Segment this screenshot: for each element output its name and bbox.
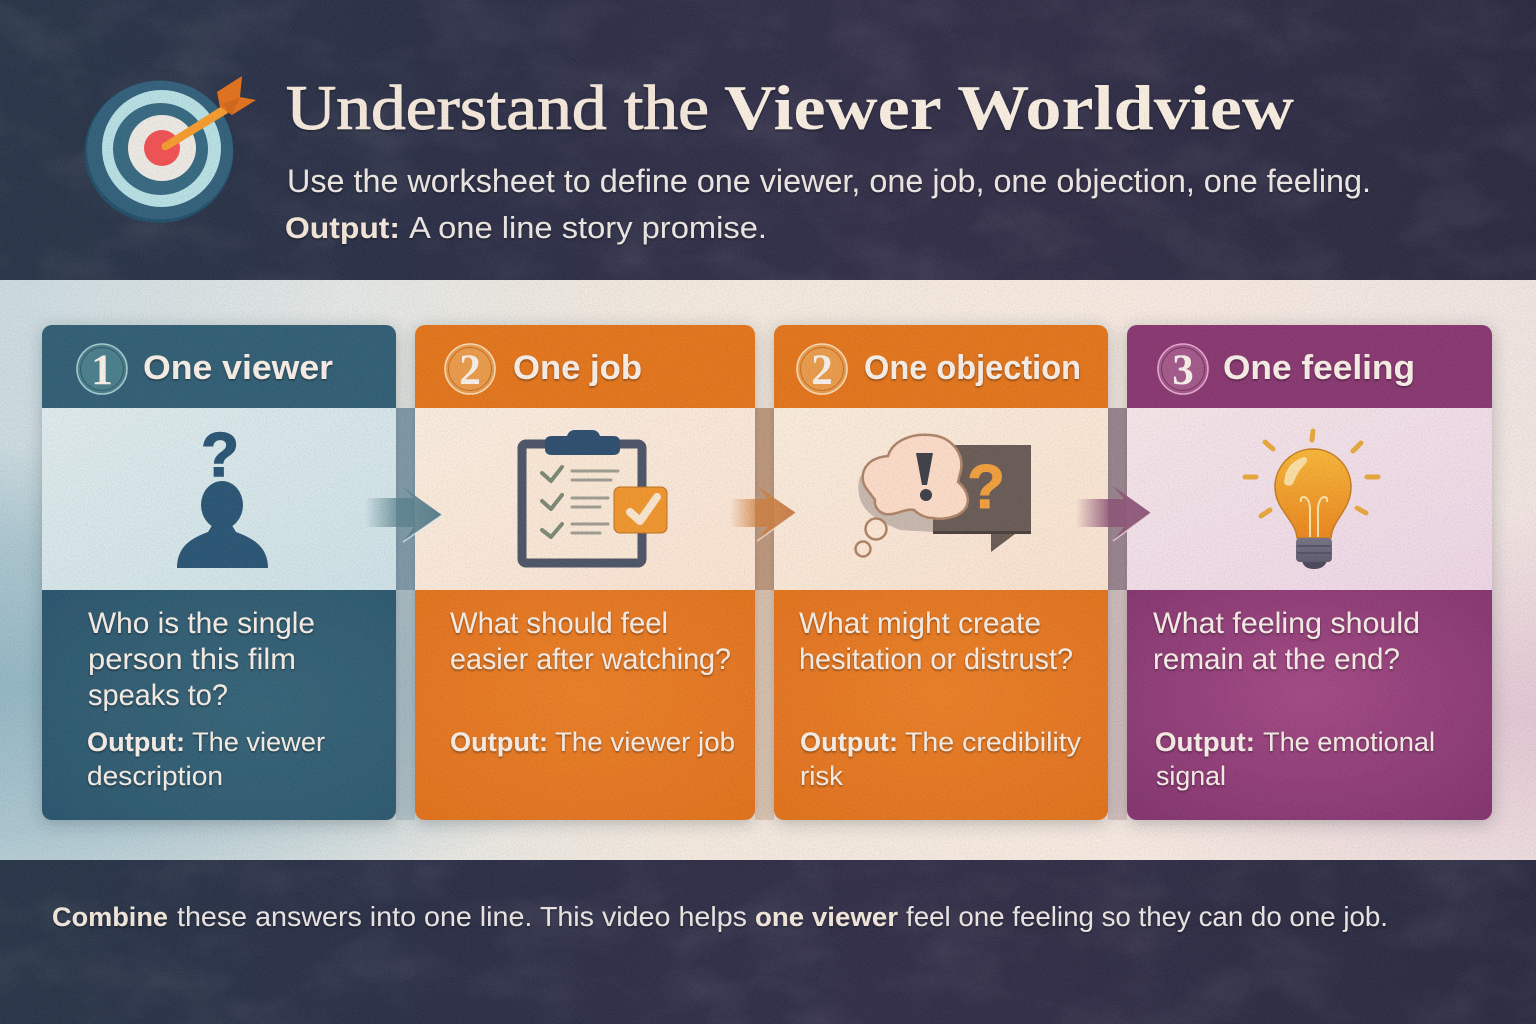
question text: What feeling should [1153,607,1420,640]
badge number 1: 1 [91,347,113,394]
panel: card 2 one job [415,325,755,820]
badge number 1 [77,344,127,394]
icon: thought cloud and speech bubble: ? [967,453,1005,522]
output text: signal [1156,761,1226,791]
footer: combine sentence: these answers into one line. This video helps [177,901,747,932]
output line: Output: [285,212,400,245]
question text: person this film [88,643,296,676]
output text: Output: [1155,727,1255,757]
badge number 2: 2 [459,347,481,394]
output line: A one line story promise. [409,210,767,245]
output text: The viewer [192,727,325,757]
footer: combine sentence [52,901,1388,932]
panel: card 4 one feeling [1127,325,1492,820]
icon: thought cloud and speech bubble [856,435,1031,556]
title: Understand the [286,72,709,143]
output text [800,727,1082,791]
title [286,72,1294,143]
heading: One viewer: One viewer [143,349,333,387]
output text: description [87,761,223,791]
panel: card 3 one objection [774,325,1108,820]
icon: person with question mark: ? [201,421,239,490]
question text: What might create [799,607,1041,640]
question text [799,607,1073,676]
question text: speaks to? [88,679,228,712]
output text: Output: [800,727,898,757]
gap shading between cards [396,408,1127,820]
output text [87,727,325,791]
badge number 2 [445,344,495,394]
badge number 2 [797,344,847,394]
icon: light bulb [1245,431,1378,569]
output text: risk [800,761,844,791]
panel: card 1 one viewer [42,325,396,820]
question text: hesitation or distrust? [799,643,1073,676]
question text: remain at the end? [1153,643,1400,676]
output text: The credibility [905,727,1082,757]
badge number 3: 3 [1172,347,1194,394]
question text: easier after watching? [450,643,731,676]
output text [450,727,735,757]
heading: One objection: One objection [864,349,1081,387]
footer: combine sentence: feel one feeling so they can do one job. [906,901,1388,932]
question text [1153,607,1420,676]
subtitle: Use the worksheet to define one viewer, one job, one objection, one feeling. [287,163,1371,199]
arrow: card 2 to card 3 [730,486,796,541]
arrow: card 1 to card 2 [365,487,442,542]
header: target icon and title block [84,72,1371,245]
output text: Output: [87,727,185,757]
footer: combine sentence: one viewer [755,902,899,932]
icon: clipboard checklist [522,430,667,563]
question text: What should feel [450,607,668,640]
heading: One feeling: One feeling [1223,349,1415,387]
badge number 2: 2 [811,347,833,394]
question text [450,607,731,676]
question text: Who is the single [88,607,315,640]
panel: light central band [0,280,1536,860]
output text: The viewer job [555,727,735,757]
output text: The emotional [1263,727,1435,757]
title: Viewer Worldview [724,72,1294,143]
question text [88,607,315,712]
badge number 3 [1158,344,1208,394]
icon: target with arrow [84,76,256,223]
output text: Output: [450,727,548,757]
icon: person with question mark [177,421,268,568]
heading: One job: One job [513,349,642,387]
footer: combine sentence: Combine [52,902,168,932]
arrow: card 3 to card 4 [1076,486,1151,541]
output text [1155,727,1435,791]
